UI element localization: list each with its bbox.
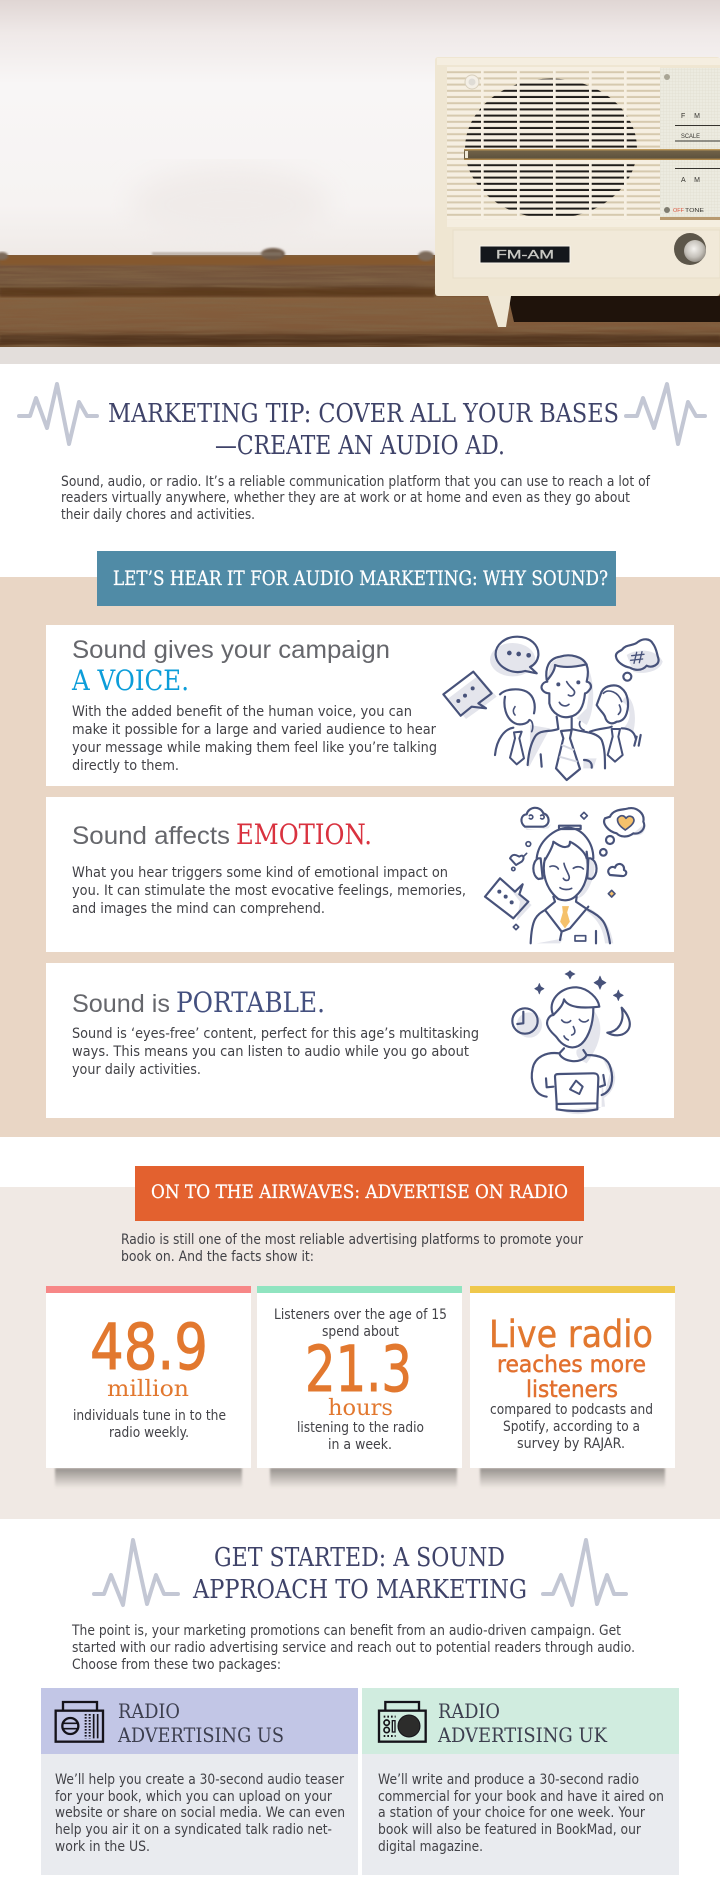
radio body: SCALE xyxy=(681,134,700,140)
heading: get started: APPROACH TO MARKETING xyxy=(192,1575,527,1605)
panel: why sound xyxy=(0,551,720,1137)
intro text block: their daily chores and activities. xyxy=(61,507,255,523)
banner: why sound xyxy=(97,551,616,606)
card text: a voice: With the added benefit of the human voice, you can xyxy=(72,704,412,720)
stat card: 21.3 hours: listening to the radio xyxy=(297,1420,424,1436)
card text: portable: your daily activities. xyxy=(72,1062,201,1078)
package: radio advertising uk: ADVERTISING UK xyxy=(437,1723,608,1747)
get started text block: The point is, your marketing promotions can benefit from an audio-driven campaign. Get xyxy=(71,1623,621,1639)
radio shadow xyxy=(508,296,720,322)
get started text block xyxy=(71,1623,635,1673)
icon: right sound pulse xyxy=(626,384,705,444)
card heading: emotion: EMOTION. xyxy=(236,818,372,851)
package text: us: work in the US. xyxy=(55,1839,150,1855)
card heading: a voice: Sound gives your campaign xyxy=(72,636,390,664)
icon: group of people talking xyxy=(443,637,663,780)
stat card: live radio xyxy=(470,1286,675,1488)
heading: get started: GET STARTED: A SOUND xyxy=(214,1543,505,1573)
heading: marketing tip xyxy=(108,399,619,461)
package text: us: website or share on social media. We can even xyxy=(55,1805,345,1821)
package: radio advertising uk xyxy=(362,1688,679,1875)
card text: emotion: you. It can stimulate the most evocative feelings, memories, xyxy=(72,883,466,899)
package text: uk: book will also be featured in BookMad, our xyxy=(378,1822,641,1838)
icon: radio with dial xyxy=(56,1702,103,1742)
stat card: live radio: Spotify, according to a xyxy=(503,1419,640,1435)
card: portable xyxy=(46,963,674,1118)
card text: a voice: make it possible for a large and varied audience to hear xyxy=(72,722,436,738)
get started text block: Choose from these two packages: xyxy=(72,1657,281,1673)
package text: us: for your book, which you can upload on your xyxy=(55,1789,332,1805)
card heading: emotion xyxy=(72,818,372,851)
stat card: live radio: listeners xyxy=(526,1377,618,1403)
radio foot xyxy=(488,296,511,327)
stat card: 21.3 hours xyxy=(257,1286,462,1488)
stat card: live radio: survey by RAJAR. xyxy=(517,1436,625,1452)
intro text block: readers virtually anywhere, whether they are at work or at home and even as they go about xyxy=(61,490,630,506)
package text: uk xyxy=(378,1772,664,1855)
radio body: TONE xyxy=(685,208,704,214)
package text: us xyxy=(55,1772,345,1855)
card text: emotion: and images the mind can comprehend. xyxy=(72,901,325,917)
card heading: a voice: A VOICE. xyxy=(71,664,189,697)
card text: a voice: your message while making them feel like you’re talking xyxy=(72,740,437,756)
radio intro text xyxy=(121,1232,583,1265)
package text: uk: digital magazine. xyxy=(378,1839,483,1855)
stat card: 48.9 million xyxy=(46,1286,251,1488)
intro text block xyxy=(61,474,651,523)
heading: get started xyxy=(192,1543,527,1605)
banner: advertise on radio: ON TO THE AIRWAVES: ADVERTISE ON RADIO xyxy=(151,1181,568,1203)
card text: portable: Sound is ‘eyes-free’ content, perfect for this age’s multitasking xyxy=(72,1026,479,1042)
icon: person listening with laptop xyxy=(512,971,630,1114)
radio intro text: book on. And the facts show it: xyxy=(121,1249,314,1265)
card heading: a voice xyxy=(71,636,390,697)
card heading: portable: PORTABLE. xyxy=(176,986,325,1019)
radio body: F M xyxy=(681,113,700,120)
banner: why sound: LET’S HEAR IT FOR AUDIO MARKETING: WHY SOUND? xyxy=(113,566,608,590)
package: radio advertising us xyxy=(41,1688,358,1875)
stat card: 21.3 hours: hours xyxy=(328,1396,393,1421)
heading: marketing tip: —CREATE AN AUDIO AD. xyxy=(215,431,505,461)
package text: uk: We’ll write and produce a 30-second radio xyxy=(378,1772,639,1788)
stat card: live radio: compared to podcasts and xyxy=(490,1402,653,1418)
grey band under hero xyxy=(0,347,720,364)
card text: a voice: directly to them. xyxy=(72,758,179,774)
icon: left sound pulse xyxy=(94,1540,178,1605)
get started text block: started with our radio advertising service and reach out to potential readers through audio. xyxy=(72,1640,635,1656)
card: a voice xyxy=(46,625,674,786)
section: get started xyxy=(41,1540,679,1875)
radio body: A M xyxy=(681,177,700,184)
card text: emotion: What you hear triggers some kind of emotional impact on xyxy=(72,865,448,881)
stat card: 48.9 million: 48.9 xyxy=(90,1311,208,1384)
radio body xyxy=(435,57,720,296)
package: radio advertising uk: RADIO xyxy=(438,1699,500,1723)
stat card: live radio: Live radio xyxy=(489,1313,653,1356)
banner: advertise on radio xyxy=(135,1166,584,1221)
package text: uk: a station of your choice for one week. Your xyxy=(378,1805,645,1821)
package text: uk: commercial for your book and have it aired on xyxy=(378,1789,664,1805)
card heading: portable: Sound is xyxy=(72,990,170,1018)
stat card: 48.9 million: radio weekly. xyxy=(109,1425,189,1441)
icon: person with headphones xyxy=(485,808,645,943)
card text: emotion xyxy=(72,865,466,917)
hero photo: radio on a wooden table xyxy=(0,0,720,364)
icon: radio with speaker xyxy=(379,1702,426,1742)
card text: portable xyxy=(72,1026,479,1078)
panel: on to the airwaves xyxy=(0,1166,720,1519)
card heading: emotion: Sound affects xyxy=(72,822,230,850)
stat card: live radio: reaches more xyxy=(497,1352,646,1378)
stat card: 48.9 million: individuals tune in to the xyxy=(73,1408,226,1424)
package: radio advertising us: RADIO xyxy=(118,1699,180,1723)
card text: portable: ways. This means you can listen to audio while you go about xyxy=(72,1044,469,1060)
icon: right sound pulse xyxy=(543,1540,626,1605)
stat card: 48.9 million: million xyxy=(107,1377,189,1402)
radio body: OFF xyxy=(673,208,685,214)
package: radio advertising us: ADVERTISING US xyxy=(117,1723,284,1747)
card: emotion xyxy=(46,797,674,952)
stat card: 21.3 hours: in a week. xyxy=(328,1437,392,1453)
section: marketing tip intro xyxy=(19,384,705,523)
heading: marketing tip: MARKETING TIP: COVER ALL YOUR BASES xyxy=(108,399,619,429)
stat card: 21.3 hours: Listeners over the age of 15 xyxy=(274,1307,447,1323)
card text: a voice xyxy=(72,704,437,774)
stat card: 21.3 hours: 21.3 xyxy=(305,1333,412,1406)
intro text block: Sound, audio, or radio. It’s a reliable communication platform that you can use to reach a lot of xyxy=(61,474,651,490)
icon: left sound pulse xyxy=(19,384,97,444)
package text: us: We’ll help you create a 30-second audio teaser xyxy=(55,1772,344,1788)
radio body: FM-AM xyxy=(496,248,554,262)
card heading: portable xyxy=(72,986,325,1019)
stat card: 21.3 hours: spend about xyxy=(322,1324,399,1340)
radio intro text: Radio is still one of the most reliable advertising platforms to promote your xyxy=(121,1232,583,1248)
package text: us: help you air it on a syndicated talk radio net- xyxy=(55,1822,332,1838)
